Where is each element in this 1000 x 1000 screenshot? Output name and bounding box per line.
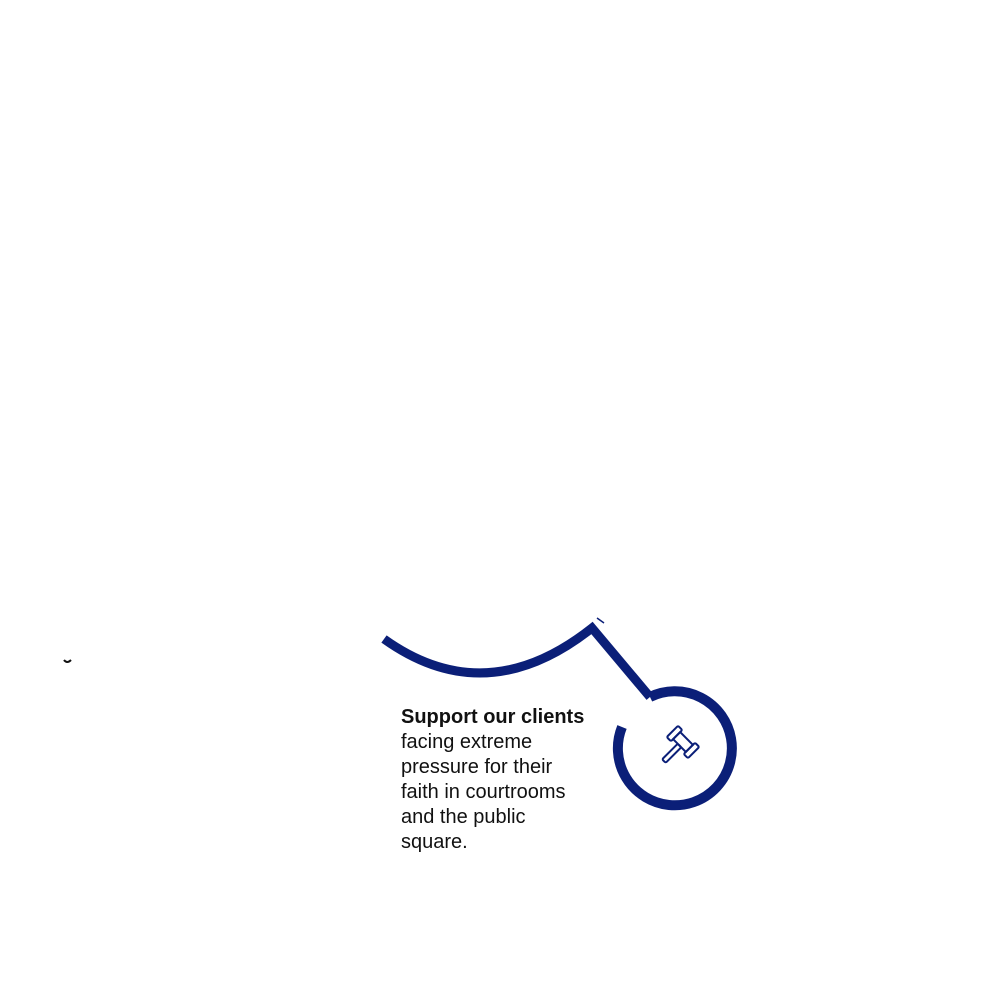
icon: gavel — [653, 726, 699, 772]
text block: pressure for their — [401, 756, 552, 778]
small mark — [64, 660, 71, 662]
ring — [618, 691, 732, 805]
text block: faith in courtrooms — [401, 781, 566, 803]
text block: Support our clients — [401, 706, 584, 728]
text block: and the public — [401, 806, 526, 828]
text block: facing extreme — [401, 731, 532, 753]
text block — [401, 706, 584, 853]
text block: square. — [401, 831, 468, 853]
curve line — [384, 618, 650, 697]
